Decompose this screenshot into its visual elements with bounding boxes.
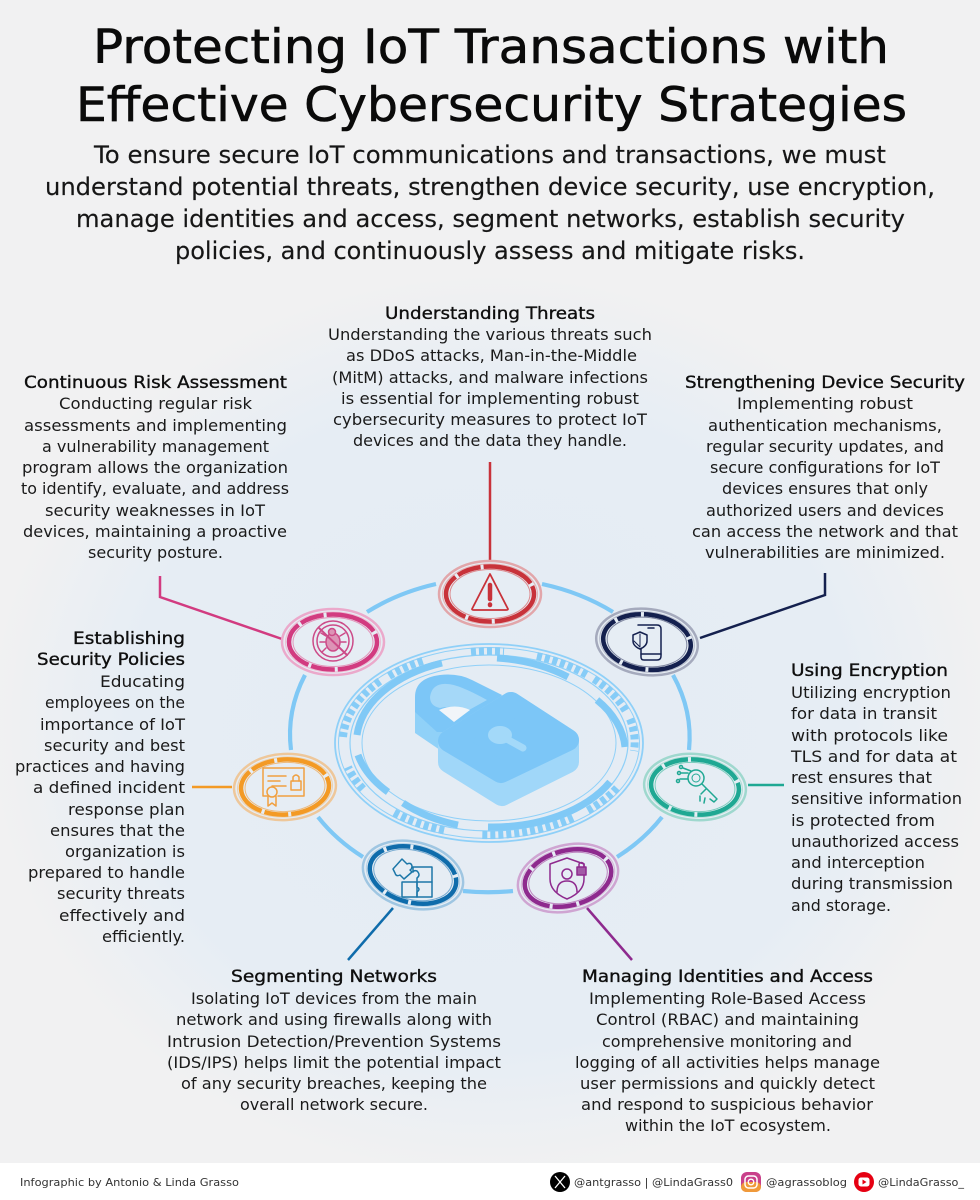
text: understanding threats <box>328 304 652 450</box>
text: using encryption: sensitive information <box>791 790 962 808</box>
icon: crossed bug <box>313 621 353 661</box>
intro text: understand potential threats, strengthen device security, use encryption, <box>45 173 935 201</box>
connector lines <box>160 462 825 960</box>
node: risk assessment <box>282 609 384 675</box>
text: segmenting networks: of any security breaches, keeping the <box>181 1075 487 1093</box>
text: establishing security policies: security and best <box>44 737 185 755</box>
icon: Instagram logo <box>741 1172 761 1192</box>
node: device security <box>592 603 702 681</box>
node: encryption <box>641 750 749 824</box>
text: segmenting networks <box>167 967 501 1114</box>
text: strengthening device security: Strengthening Device Security <box>685 373 965 393</box>
text: managing identities and access: Managing Identities and Access <box>582 967 873 987</box>
text: continuous risk assessment: assessments and implementing <box>24 417 287 435</box>
text: using encryption: is protected from <box>791 812 935 830</box>
icon: puzzle pieces <box>393 859 432 897</box>
text: using encryption: with protocols like <box>791 727 948 745</box>
title <box>76 20 907 133</box>
footer credit: Infographic by Antonio & Linda Grasso <box>20 1176 239 1189</box>
text: using encryption: and interception <box>791 854 925 872</box>
text: managing identities and access: Control (RBAC) and maintaining <box>596 1011 859 1029</box>
text: understanding threats: Understanding Threats <box>385 304 595 324</box>
text: continuous risk assessment: security weaknesses in IoT <box>45 502 265 520</box>
text: using encryption: unauthorized access <box>791 833 959 851</box>
text: establishing security policies: security threats <box>57 885 185 903</box>
icon: warning triangle <box>472 574 508 610</box>
text: strengthening device security: vulnerabilities are minimized. <box>705 544 945 562</box>
text: establishing security policies: organization is <box>65 843 185 861</box>
text: understanding threats: devices and the data they handle. <box>353 432 627 450</box>
node: policies <box>232 751 338 823</box>
icon: shield with user <box>550 858 586 899</box>
text: establishing security policies: response plan <box>68 801 185 819</box>
text: using encryption: and storage. <box>791 897 891 915</box>
text: strengthening device security: authentication mechanisms, <box>708 417 942 435</box>
text: continuous risk assessment: program allows the organization <box>22 459 288 477</box>
text: segmenting networks: overall network secure. <box>240 1096 428 1114</box>
text: establishing security policies: effectively and <box>59 907 185 925</box>
text: continuous risk assessment: to identify, evaluate, and address <box>21 480 289 498</box>
icon: phone and shield <box>633 625 661 660</box>
text: establishing security policies: ensures that the <box>50 822 185 840</box>
text: continuous risk assessment: Conducting regular risk <box>59 395 252 413</box>
text: managing identities and access: comprehensive monitoring and <box>602 1033 852 1051</box>
icon: X logo <box>550 1172 570 1192</box>
icon: central padlock <box>415 675 568 795</box>
text: strengthening device security: secure configurations for IoT <box>710 459 940 477</box>
text: continuous risk assessment: security posture. <box>88 544 223 562</box>
text: establishing security policies: Security Policies <box>37 650 185 670</box>
icon: certificate with lock <box>263 768 304 806</box>
text: strengthening device security: Implementing robust <box>737 395 913 413</box>
text: understanding threats: as DDoS attacks, Man-in-the-Middle <box>346 347 637 365</box>
footer <box>0 1163 980 1200</box>
text: strengthening device security: devices ensures that only <box>722 480 928 498</box>
X handles: @antgrasso | @LindaGrass0 <box>574 1176 733 1189</box>
text: using encryption: rest ensures that <box>791 769 932 787</box>
text: strengthening device security: can access the network and that <box>692 523 958 541</box>
text: strengthening device security: regular security updates, and <box>706 438 944 456</box>
text: establishing security policies: Educating <box>100 673 185 691</box>
text: managing identities and access: user permissions and quickly detect <box>580 1075 875 1093</box>
central tech ring <box>335 644 643 842</box>
text: establishing security policies: importance of IoT <box>40 716 185 734</box>
icon: YouTube logo <box>854 1172 874 1192</box>
text: using encryption: for data in transit <box>791 705 937 723</box>
intro text <box>45 141 935 265</box>
text: understanding threats: cybersecurity measures to protect IoT <box>333 411 647 429</box>
text: using encryption: during transmission <box>791 875 953 893</box>
node: identities <box>511 834 625 922</box>
text: segmenting networks: Isolating IoT devices from the main <box>191 990 477 1008</box>
text: using encryption: TLS and for data at <box>790 748 957 766</box>
text: establishing security policies: prepared to handle <box>28 864 185 882</box>
text: establishing security policies: Establishing <box>73 629 185 649</box>
text: establishing security policies: efficiently. <box>102 928 185 946</box>
text: using encryption: Using Encryption <box>791 661 948 681</box>
intro text: manage identities and access, segment networks, establish security <box>76 205 905 233</box>
text: continuous risk assessment: devices, maintaining a proactive <box>23 523 287 541</box>
text: managing identities and access: and respond to suspicious behavior <box>581 1096 874 1114</box>
title: Protecting IoT Transactions with <box>93 20 889 75</box>
Instagram handle: @agrassoblog <box>766 1176 847 1189</box>
intro text: policies, and continuously assess and mitigate risks. <box>175 237 805 265</box>
text: establishing security policies: practices and having <box>15 758 185 776</box>
intro text: To ensure secure IoT communications and transactions, we must <box>93 141 886 169</box>
text: segmenting networks: Segmenting Networks <box>231 967 437 987</box>
text: continuous risk assessment <box>21 373 289 562</box>
text: using encryption <box>790 661 962 915</box>
text: understanding threats: is essential for implementing robust <box>341 390 639 408</box>
text: managing identities and access <box>575 967 880 1135</box>
text: understanding threats: Understanding the various threats such <box>328 326 652 344</box>
text: managing identities and access: within the IoT ecosystem. <box>625 1117 831 1135</box>
text: managing identities and access: logging of all activities helps manage <box>575 1054 880 1072</box>
YouTube handle: @LindaGrasso_ <box>878 1176 965 1189</box>
text: establishing security policies: a defined incident <box>33 779 185 797</box>
node: threats <box>439 561 541 627</box>
text: managing identities and access: Implementing Role-Based Access <box>589 990 866 1008</box>
node: networks <box>356 831 470 919</box>
text: using encryption: Utilizing encryption <box>791 684 951 702</box>
text: establishing security policies: employees on the <box>45 694 185 712</box>
text: strengthening device security <box>685 373 965 562</box>
text: establishing security policies <box>15 629 185 946</box>
text: segmenting networks: (IDS/IPS) helps limit the potential impact <box>167 1054 501 1072</box>
text: segmenting networks: Intrusion Detection/Prevention Systems <box>167 1033 501 1051</box>
text: continuous risk assessment: Continuous Risk Assessment <box>24 373 287 393</box>
text: strengthening device security: authorized users and devices <box>706 502 944 520</box>
text: continuous risk assessment: a vulnerability management <box>42 438 269 456</box>
icon: digital key <box>676 766 717 803</box>
connecting ring arcs <box>290 584 690 892</box>
title: Effective Cybersecurity Strategies <box>76 78 907 133</box>
text: segmenting networks: network and using firewalls along with <box>176 1011 492 1029</box>
text: understanding threats: (MitM) attacks, and malware infections <box>332 369 648 387</box>
